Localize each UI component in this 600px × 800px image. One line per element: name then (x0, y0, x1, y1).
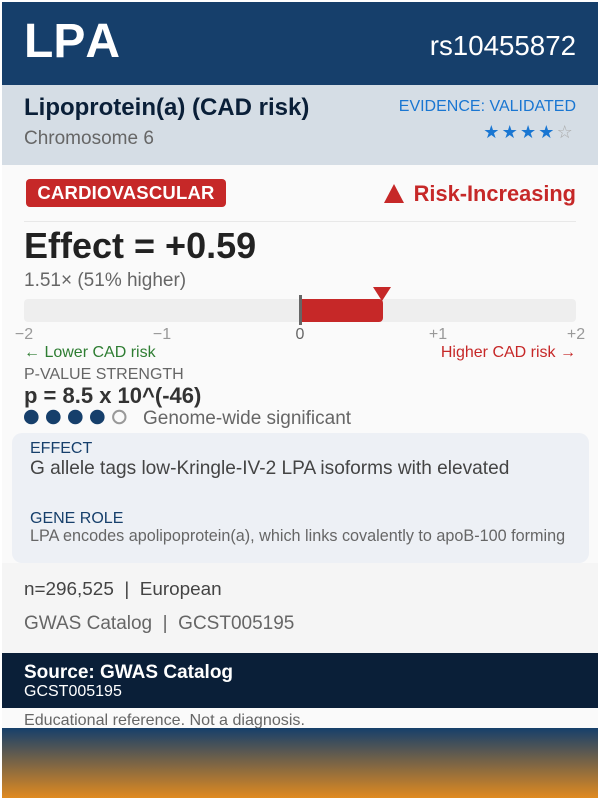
disclaimer: Educational reference. Not a diagnosis. (24, 711, 305, 729)
study info band (2, 563, 598, 653)
risk direction: Risk-Increasing (414, 181, 576, 206)
effect scale bar (24, 287, 576, 325)
p-value dots (24, 410, 126, 424)
evidence stars: ★★★★☆ (483, 122, 575, 143)
header band (2, 2, 598, 85)
effect multiplier: 1.51× (51% higher) (24, 270, 186, 291)
tick -2: −2 (15, 326, 33, 343)
lower risk label: ← Lower CAD risk (24, 344, 156, 361)
icon: risk triangle (384, 184, 404, 203)
category badge: CARDIOVASCULAR (37, 182, 215, 203)
effect value: Effect = +0.59 (24, 225, 256, 266)
p-value: p = 8.5 x 10^(-46) (24, 383, 201, 408)
marker (373, 287, 391, 301)
rsID: rs10455872 (430, 30, 576, 61)
trait title: Lipoprotein(a) (CAD risk) (24, 94, 309, 121)
p-value heading: P-VALUE STRENGTH (24, 366, 184, 383)
effect text: G allele tags low-Kringle-IV-2 LPA isoforms with elevated (30, 458, 509, 479)
scale labels (15, 326, 585, 343)
bar fill (300, 299, 383, 322)
effect heading: EFFECT (30, 440, 92, 457)
evidence label: EVIDENCE: VALIDATED (399, 98, 576, 115)
higher risk label: Higher CAD risk → (441, 344, 576, 361)
divider (24, 221, 576, 222)
gradient band (2, 728, 598, 798)
tick 0: 0 (296, 326, 304, 343)
source band (2, 653, 598, 708)
tick -1: −1 (153, 326, 171, 343)
sample size: n=296,525 | European (24, 579, 222, 600)
gene name: LPA (24, 15, 120, 68)
tick +1: +1 (429, 326, 447, 343)
chromosome: Chromosome 6 (24, 128, 154, 149)
subheader band (2, 85, 598, 165)
source id: GCST005195 (24, 683, 122, 700)
zero tick (298, 295, 302, 325)
bar track (24, 299, 576, 322)
tick +2: +2 (567, 326, 585, 343)
significance label: Genome-wide significant (143, 408, 351, 429)
gene role text: LPA encodes apolipoprotein(a), which links covalently to apoB-100 forming (30, 527, 565, 545)
category badge (26, 179, 226, 207)
info panel (12, 433, 589, 563)
source title: Source: GWAS Catalog (24, 662, 233, 683)
catalog reference: GWAS Catalog | GCST005195 (24, 613, 294, 634)
gene role heading: GENE ROLE (30, 510, 123, 527)
